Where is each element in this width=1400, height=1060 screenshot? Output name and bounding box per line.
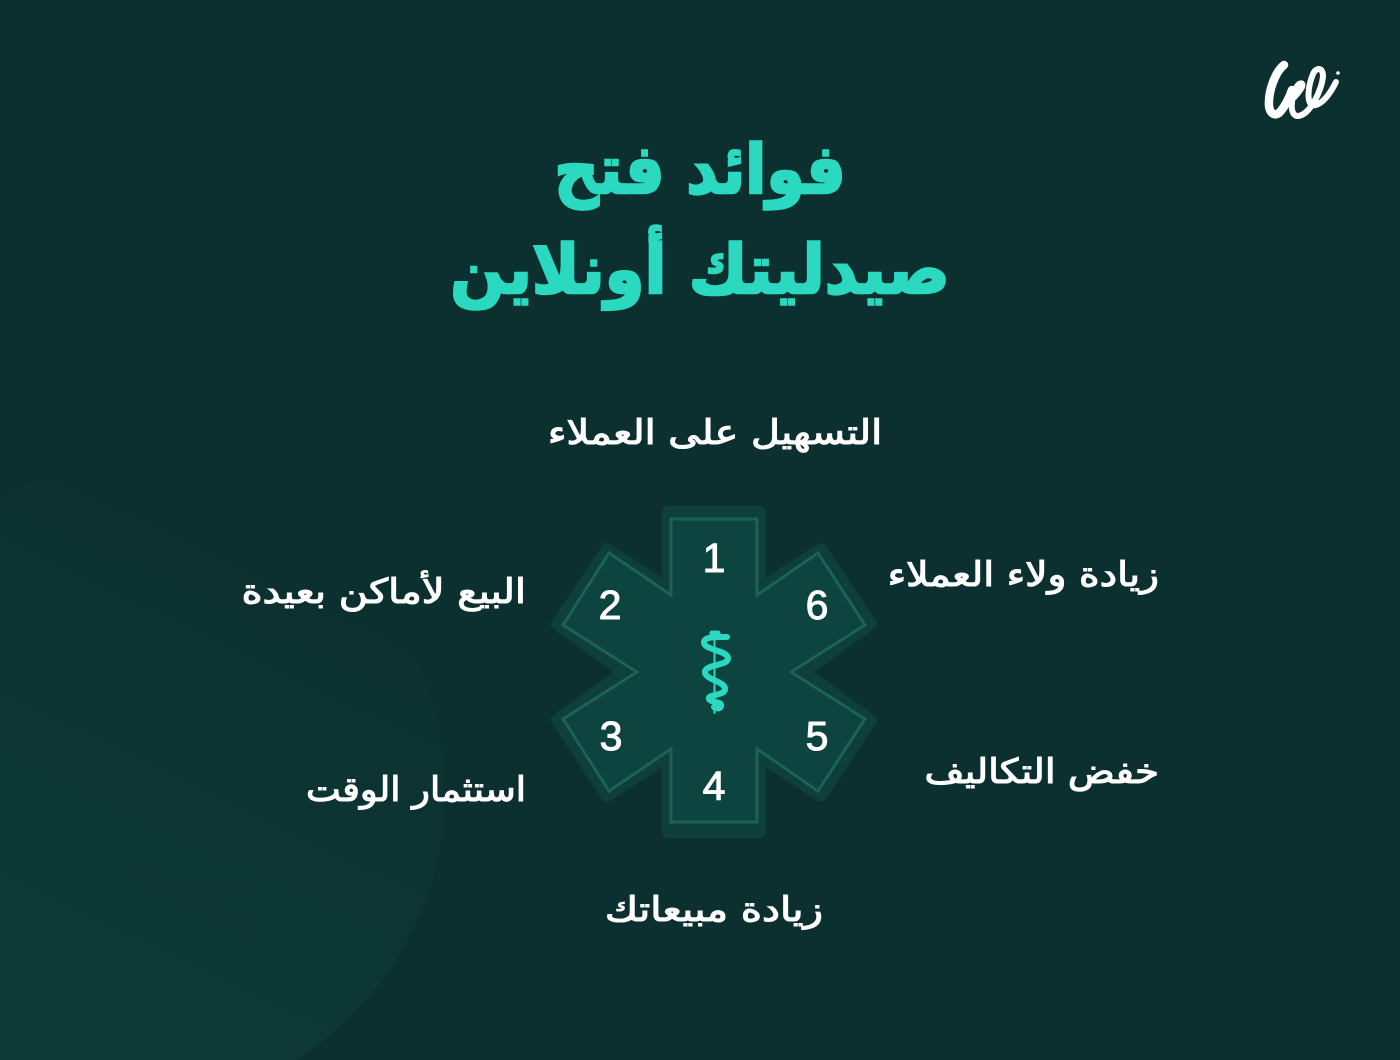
number 6: 6: [806, 582, 828, 628]
title: صيدليتك أونلاين: [450, 231, 950, 310]
label 1: top: التسهيل على العملاء: [548, 413, 882, 453]
title: [450, 131, 950, 312]
star inner body: [563, 519, 865, 822]
label 6: upper right: زيادة ولاء العملاء: [888, 555, 1159, 595]
number 5: 5: [806, 713, 828, 759]
star outer halo: [557, 512, 871, 832]
icon: rod of asclepius: [704, 632, 728, 713]
label 3: lower left: استثمار الوقت: [306, 770, 526, 810]
star of life diagram: [551, 506, 877, 838]
number 2: 2: [599, 582, 621, 628]
label 4: bottom: زيادة مبيعاتك: [605, 890, 823, 930]
number 3: 3: [600, 713, 622, 759]
logo: [1264, 60, 1340, 119]
number 1: 1: [703, 535, 725, 581]
label 5: lower right: خفض التكاليف: [924, 752, 1159, 792]
title: فوائد فتح: [554, 131, 846, 210]
number 4: 4: [703, 763, 725, 809]
label 2: upper left: البيع لأماكن بعيدة: [242, 572, 526, 612]
